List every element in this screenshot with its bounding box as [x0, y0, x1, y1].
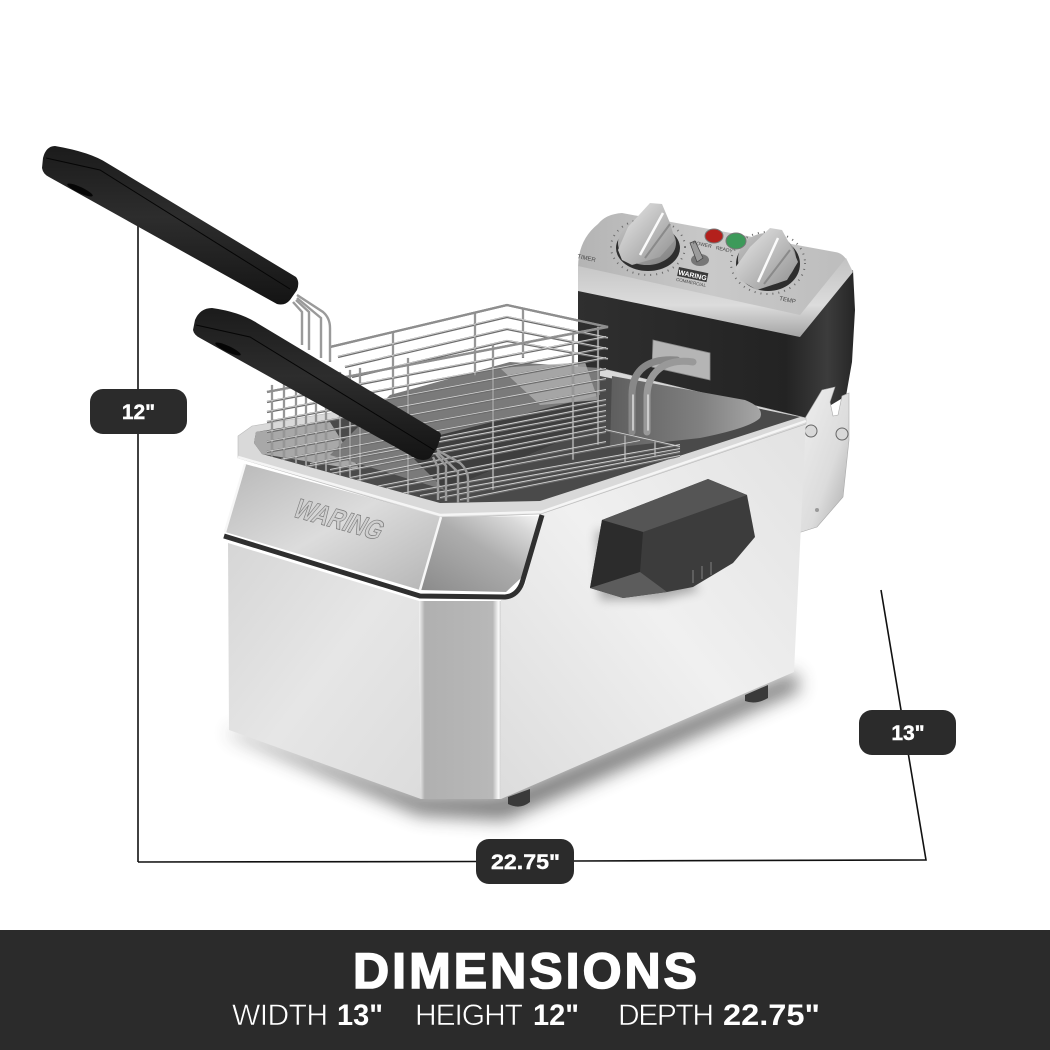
mounting bracket — [798, 387, 849, 533]
label: depth 22.75 inches — [476, 839, 574, 884]
specification line: HEIGHT — [415, 999, 523, 1032]
label: height 12 inches — [90, 389, 187, 434]
embossed brand: WARING — [287, 494, 390, 546]
fryer — [42, 146, 855, 807]
specification line: WIDTH — [232, 999, 328, 1032]
inner basket tray — [330, 362, 600, 490]
tank interior — [254, 376, 800, 503]
tank left lit wall — [254, 422, 360, 470]
front wall — [228, 543, 421, 799]
specification line: DEPTH — [618, 999, 714, 1032]
tray dark stripes — [400, 395, 600, 490]
control panel front lip — [578, 258, 853, 337]
control panel top — [578, 213, 846, 316]
panel labels: TEMP — [779, 296, 796, 305]
rim front highlight — [238, 421, 806, 515]
panel labels — [577, 240, 796, 305]
label: width 13 inches: 13" — [891, 722, 925, 745]
specification line: 12" — [533, 999, 579, 1032]
specification line — [232, 999, 820, 1032]
panel labels: TIMER — [577, 254, 597, 264]
upper front panel — [225, 464, 441, 590]
heading: DIMENSIONS — [353, 943, 697, 999]
dimension line: width and depth — [138, 590, 926, 862]
panel logo: WARING — [678, 270, 708, 283]
panel labels: POWER — [692, 240, 712, 250]
temperature knob — [731, 228, 805, 294]
rear basket handle wires — [293, 295, 330, 362]
panel logo — [676, 267, 709, 288]
front basket handle — [193, 308, 441, 460]
corner wall — [419, 601, 501, 799]
specification line: 22.75" — [723, 999, 820, 1032]
footer band — [0, 930, 1050, 1050]
tank rim — [238, 368, 806, 518]
black gasket strip — [224, 515, 542, 597]
heating element pipes — [632, 360, 693, 432]
rear basket handle — [42, 146, 298, 304]
side handle shadow — [596, 530, 700, 600]
label: height 12 inches: 12" — [122, 401, 155, 424]
front basket handle wires — [433, 450, 468, 503]
fry basket wires — [267, 304, 680, 500]
tank basin right — [610, 376, 761, 448]
ready light — [726, 233, 746, 249]
side wall — [501, 420, 806, 799]
side handle — [590, 479, 755, 598]
fry basket top rim — [267, 305, 608, 392]
rear foot — [745, 685, 768, 702]
dimension line: height — [137, 222, 139, 862]
label: depth 22.75 inches: 22.75" — [491, 851, 560, 874]
power light — [705, 229, 723, 243]
toggle switch — [690, 241, 709, 266]
front foot — [508, 789, 530, 807]
upper corner panel — [420, 516, 540, 592]
timer knob — [611, 203, 685, 275]
control box black housing — [578, 270, 855, 420]
panel logo: COMMERCIAL — [676, 277, 707, 288]
control box — [577, 203, 855, 420]
heating element plate — [652, 340, 710, 380]
label: width 13 inches — [859, 710, 956, 755]
tray highlight — [500, 362, 598, 405]
specification line: 13" — [337, 999, 383, 1032]
panel bevel highlights — [225, 464, 441, 590]
panel labels: READY — [715, 245, 734, 255]
floor shadow — [229, 672, 800, 820]
